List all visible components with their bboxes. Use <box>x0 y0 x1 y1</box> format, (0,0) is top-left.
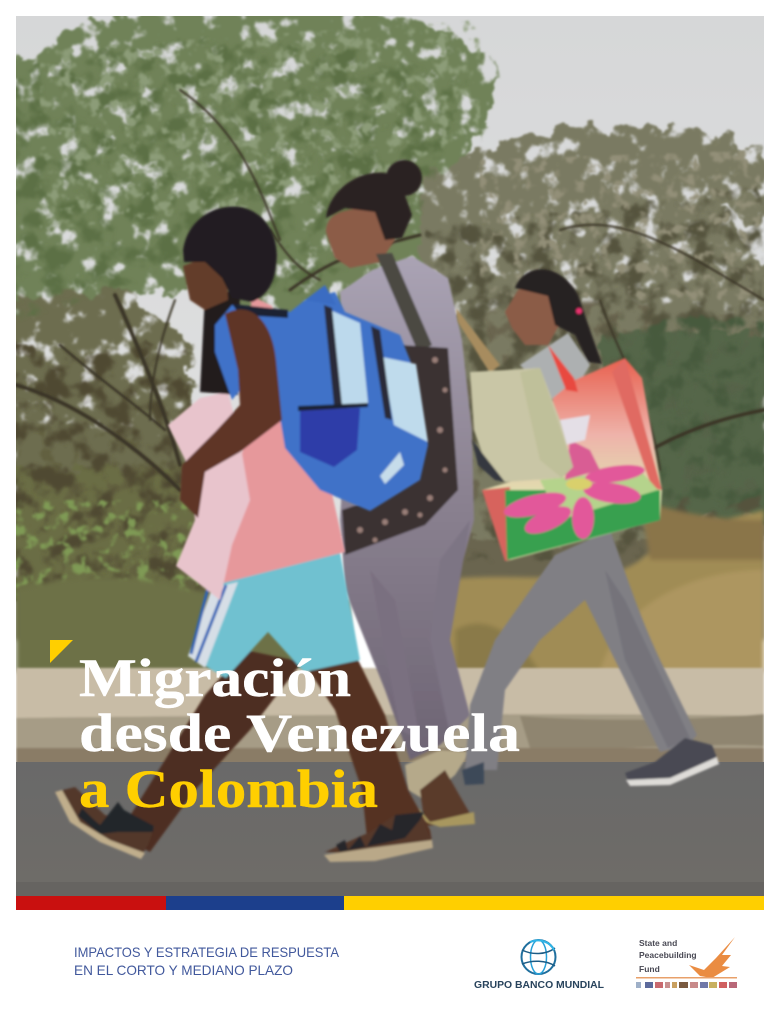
sky <box>16 16 764 536</box>
rear sandal <box>62 786 151 852</box>
girl with backpack <box>55 207 433 862</box>
trees foliage: base layer <box>0 5 780 600</box>
grey top <box>520 333 590 402</box>
subtitle: EN EL CORTO Y MEDIANO PLAZO <box>74 962 293 978</box>
pink flower <box>502 462 646 539</box>
roadside vegetation <box>16 500 764 672</box>
lower foliage base <box>16 301 764 640</box>
hair ponytail <box>200 290 240 395</box>
arm <box>180 310 282 518</box>
logo: State and Peacebuilding Fund <box>636 937 737 988</box>
icon: globe <box>522 940 556 974</box>
wooden stick <box>456 308 500 373</box>
trees foliage: dark mottling <box>0 41 770 600</box>
title <box>79 648 520 819</box>
donor flags <box>636 982 737 988</box>
front pocket <box>300 408 360 467</box>
logo: State and Peacebuilding Fund: State and <box>639 938 677 948</box>
head <box>326 208 395 268</box>
yellow triangle accent <box>50 640 73 663</box>
sidewalk <box>16 668 764 764</box>
tricolor band <box>16 896 764 910</box>
feet and sandals <box>405 750 470 800</box>
logo: World Bank Group <box>474 940 604 991</box>
face <box>183 250 228 310</box>
shorts <box>188 552 360 678</box>
floral shoulder bag <box>342 345 458 555</box>
logo: State and Peacebuilding Fund: Fund <box>639 964 660 974</box>
rear shoe <box>462 762 484 785</box>
canvas bag <box>470 368 573 482</box>
red tote bag <box>482 358 662 561</box>
title line 3: a Colombia <box>79 759 378 819</box>
hair <box>183 207 277 302</box>
dress <box>340 256 474 760</box>
subtitle <box>74 944 340 978</box>
green base of bag <box>505 490 660 560</box>
pink bundle <box>168 392 250 600</box>
light panels <box>330 310 368 407</box>
front sandal <box>325 818 430 854</box>
icon: orange wing <box>689 937 735 978</box>
trousers <box>465 530 697 770</box>
trees foliage: light highlights <box>0 20 760 600</box>
straps and zips <box>324 305 392 420</box>
logo: World Bank Group: GRUPO BANCO MUNDIAL <box>474 980 604 991</box>
shoulder bag strap <box>376 253 432 352</box>
title line 1: Migración <box>79 648 351 708</box>
curb <box>16 714 764 752</box>
road <box>16 762 764 896</box>
logo: State and Peacebuilding Fund: Peacebuilding <box>639 950 697 960</box>
pink top <box>215 295 345 585</box>
title line 2: desde Venezuela <box>79 703 520 763</box>
subtitle: IMPACTOS Y ESTRATEGIA DE RESPUESTA <box>74 944 340 960</box>
woman in grey dress <box>326 160 475 827</box>
legs <box>118 650 302 852</box>
head <box>505 285 562 345</box>
tree branches <box>16 90 764 490</box>
backpack <box>215 285 428 511</box>
woman with red bag <box>456 269 719 786</box>
front shoe <box>625 738 717 779</box>
